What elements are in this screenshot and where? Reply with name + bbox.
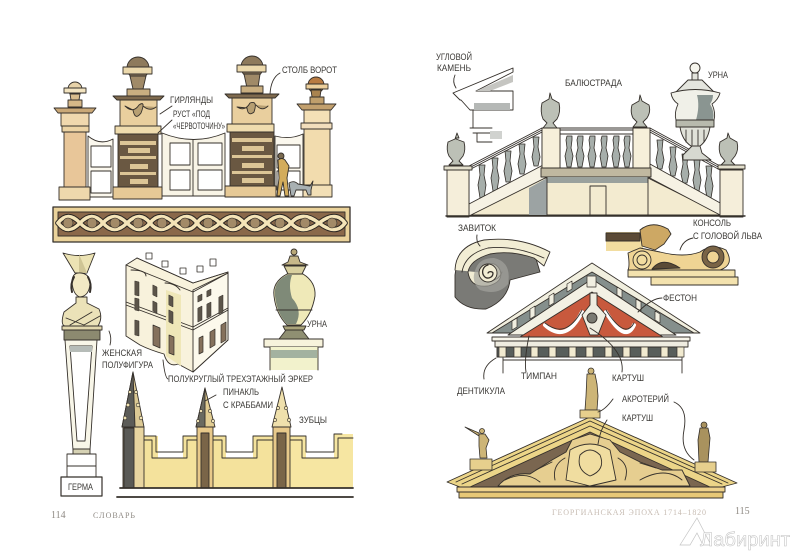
pier 1 (54, 82, 96, 200)
labels: right page: КАМЕНЬ (437, 63, 471, 73)
watermark: Лабиринт: Лабиринт (700, 530, 790, 551)
labels: right page: БАЛЮСТРАДА (565, 78, 622, 88)
page footer: left (51, 510, 135, 521)
labels: left page: СТОЛБ ВОРОТ (282, 65, 337, 75)
labels: left page: ЗУБЦЫ (299, 415, 327, 425)
labels: right page: ТИМПАН (521, 371, 557, 381)
labels: right page: КОНСОЛЬ (693, 218, 731, 228)
labels: right page: КАРТУШ (622, 413, 653, 423)
labels: right page: С ГОЛОВОЙ ЛЬВА (693, 230, 762, 241)
pier 3 (225, 56, 279, 197)
illustration: pediment with cartouche and statues (447, 368, 737, 498)
labels: left page: С КРАББАМИ (223, 400, 273, 410)
illustration: crenellated wall with pinnacles (117, 372, 353, 497)
labels: left page: ПИНАКЛЬ (223, 387, 259, 397)
labels: right page: ФЕСТОН (663, 293, 697, 303)
labels: left page: РУСТ «ПОД (173, 109, 210, 119)
illustration: urn (264, 249, 323, 370)
large urn (671, 63, 720, 160)
labels: left page: ПОЛУФИГУРА (102, 360, 153, 370)
labels: right page (436, 51, 762, 423)
illustration: bay-window building (126, 253, 228, 372)
illustration: gate with piers (54, 56, 336, 200)
labels: left page: ЖЕНСКАЯ (102, 348, 142, 358)
page footer: left: 114 (51, 510, 66, 521)
frieze: guilloche band (53, 207, 350, 242)
labels: left page: «ЧЕРВОТОЧИНУ» (173, 121, 225, 131)
watermark: Лабиринт (680, 518, 790, 551)
illustration: volute scroll (455, 239, 550, 309)
page footer: right: 115 (735, 506, 750, 517)
pier 2 (113, 57, 164, 199)
gate railings (88, 133, 303, 197)
labels: left page: ПОЛУКРУГЛЫЙ ТРЕХЭТАЖНЫЙ ЭРКЕР (168, 373, 313, 384)
pier 4 (297, 77, 336, 197)
page footer: right (552, 506, 750, 517)
illustration: corner stone cornice (453, 68, 513, 142)
labels: right page: ЗАВИТОК (458, 223, 497, 233)
leader lines (158, 73, 694, 460)
small urns (447, 93, 738, 165)
labels: right page: УГЛОВОЙ (436, 51, 472, 62)
illustration: lion-head console (606, 225, 738, 285)
illustration: herm (61, 253, 111, 496)
labels: left page (68, 65, 337, 492)
labels: right page: ДЕНТИКУЛА (457, 386, 505, 396)
acroterion statues (465, 368, 716, 472)
labels: right page: УРНА (708, 70, 728, 80)
figure with dog (277, 153, 313, 196)
illustration: balustrade (444, 63, 745, 217)
labels: left page: УРНА (307, 319, 327, 329)
labels: right page: КАРТУШ (612, 373, 644, 383)
page footer: left: СЛОВАРЬ (93, 511, 135, 520)
page footer: right: ГЕОРГИАНСКАЯ ЭПОХА 1714–1820 (552, 508, 706, 517)
labels: right page: АКРОТЕРИЙ (622, 393, 669, 404)
labels: left page: ГЕРМА (68, 482, 93, 492)
labels: left page: ГИРЛЯНДЫ (170, 95, 213, 105)
illustration: pediment with festoon (487, 263, 700, 373)
